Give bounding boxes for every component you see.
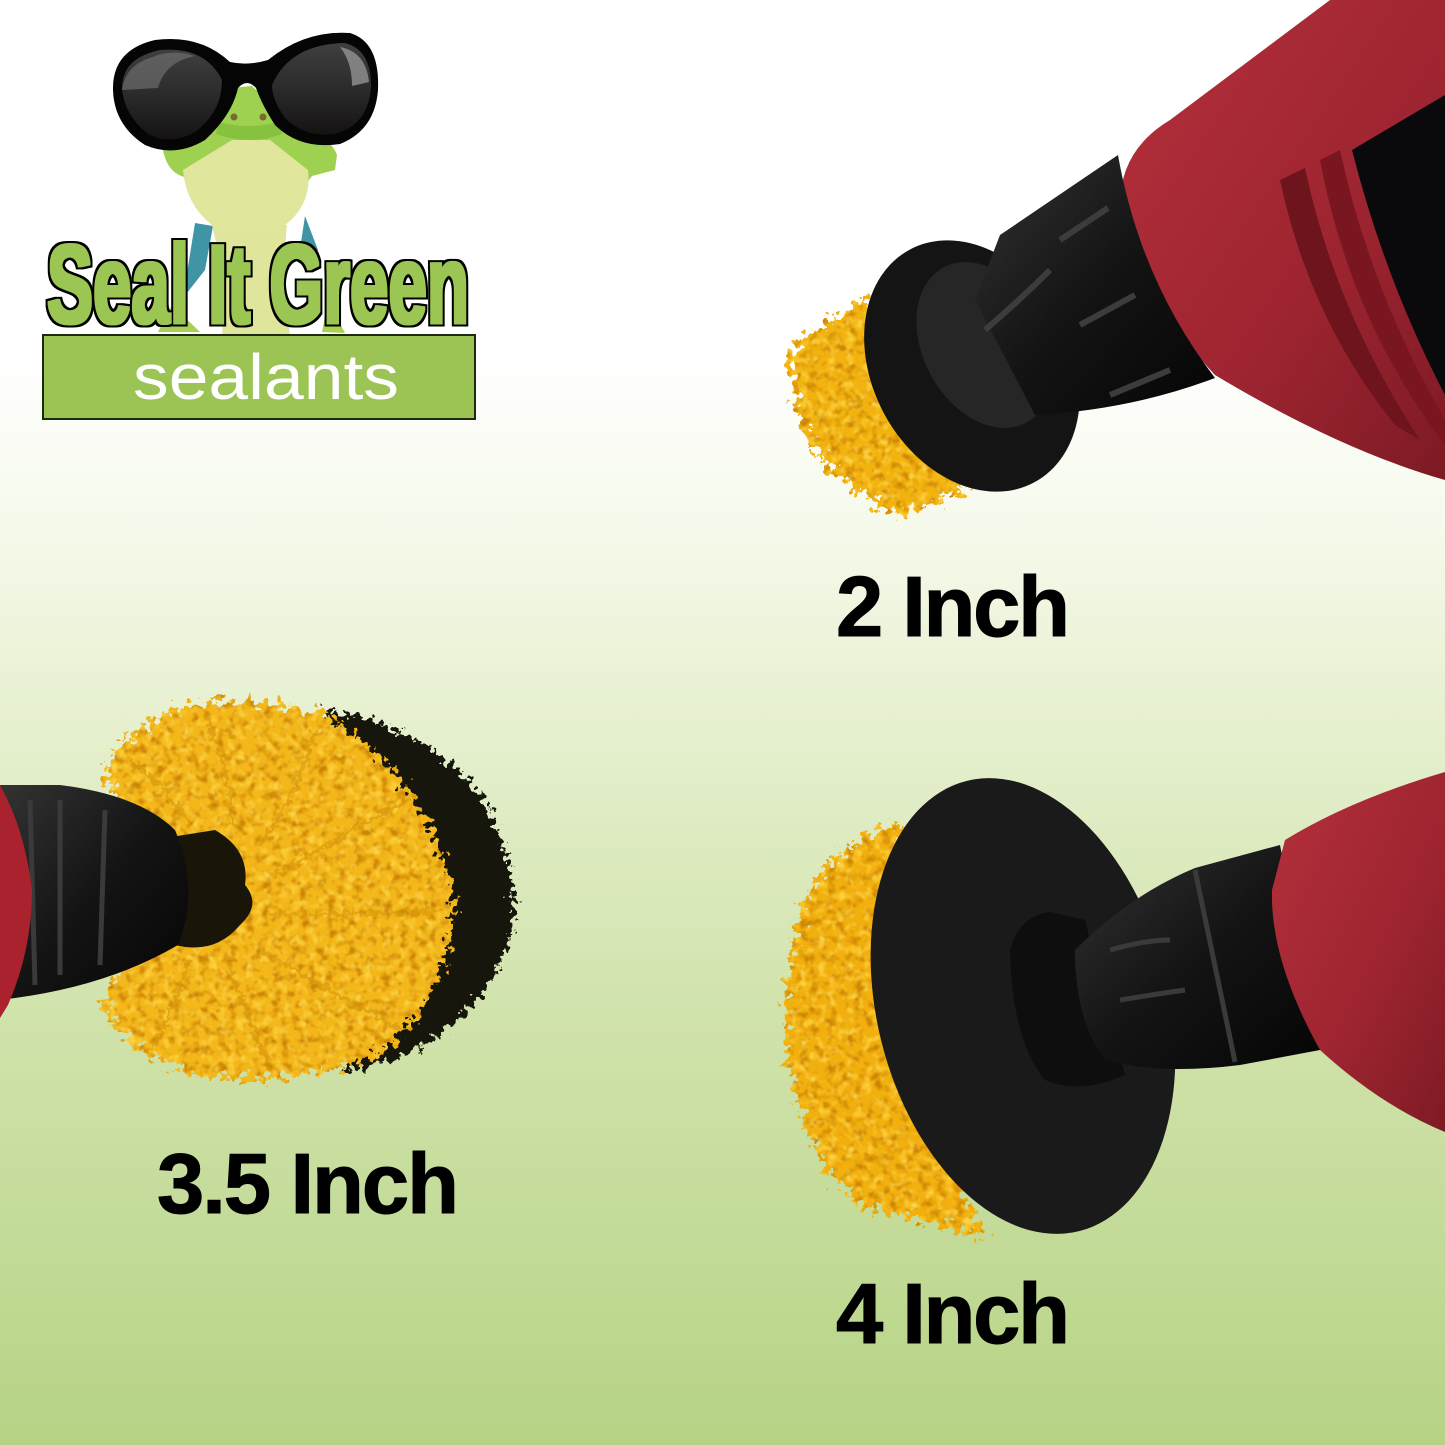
- icon: sunglasses: [113, 33, 378, 150]
- label: 3.5 Inch: 3.5 Inch: [157, 1137, 459, 1232]
- chuck: [1075, 845, 1320, 1069]
- label: 2 Inch: 2 Inch: [836, 560, 1070, 655]
- label: 4 Inch: 4 Inch: [836, 1267, 1070, 1362]
- backing disc: [822, 203, 1122, 529]
- brush centre hub: [165, 830, 252, 948]
- logo wordmark: Seal It Green: [47, 222, 469, 347]
- chuck: [975, 155, 1215, 415]
- backing disc: [825, 746, 1221, 1266]
- icon: frog mascot: [158, 86, 345, 335]
- chuck: [0, 785, 188, 1000]
- product: 3.5 inch brush on drill: [0, 701, 513, 1232]
- product: 2 inch brush on drill: [790, 0, 1445, 655]
- bristles: [790, 298, 965, 515]
- product: 4 inch brush on drill: [786, 746, 1445, 1362]
- drill body: [0, 785, 32, 1018]
- bristles: [786, 824, 985, 1236]
- drill body: [1120, 0, 1445, 480]
- bristle dome yellow: [102, 701, 452, 1079]
- bristle dome black tip: [320, 710, 513, 1072]
- logo green banner: [43, 335, 475, 419]
- logo banner text: sealants: [133, 341, 399, 413]
- logo: Seal It Green sealants: [43, 33, 475, 419]
- drill body: [1272, 772, 1445, 1132]
- bristle fibre highlights: [130, 715, 440, 1070]
